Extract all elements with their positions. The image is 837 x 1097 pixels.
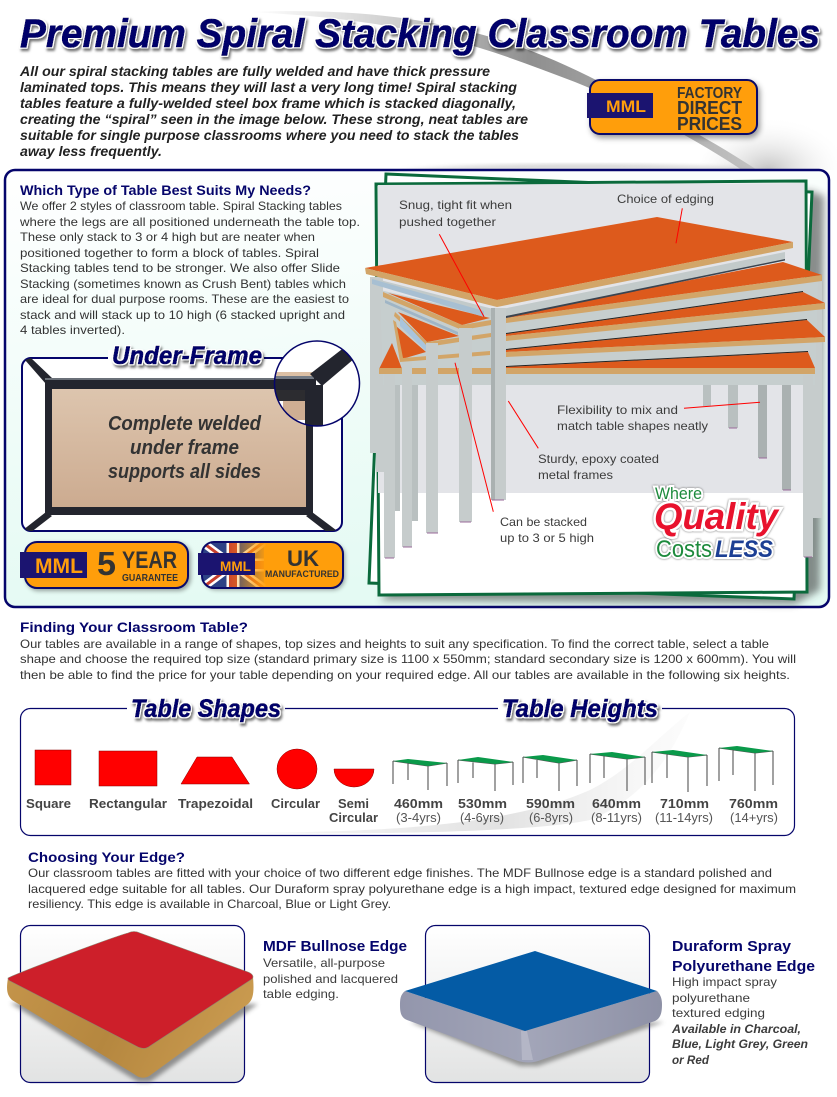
callout: flexibility	[557, 403, 708, 433]
text block: table styles: We offer 2 styles of classroom table. Spiral Stacking tables	[20, 199, 342, 213]
shape: semi circular: Circular	[329, 810, 378, 825]
height: 760mm: 760mm	[729, 796, 778, 811]
height: 640mm: 640mm	[592, 796, 641, 811]
height: 640mm	[590, 752, 645, 825]
text block: finding: then be able to find the price for your table depending on your required edge. All our tables are available in the following six heights.	[20, 668, 790, 682]
logo: where quality costs less: Where	[655, 484, 702, 503]
height: 460mm: 460mm	[394, 796, 443, 811]
shape: square: Square	[26, 796, 71, 811]
under-frame caption: Complete welded	[108, 413, 262, 435]
height: 590mm	[523, 755, 577, 825]
intro text: laminated tops. This means they will last a very long time! Spiral stacking	[20, 79, 517, 95]
under-frame caption: supports all sides	[108, 461, 261, 483]
intro text: creating the “spiral” seen in the image below. These strong, neat tables are	[20, 111, 528, 127]
text block: mdf edge: table edging.	[263, 987, 339, 1001]
height: 640mm: (8-11yrs)	[591, 810, 642, 825]
text block: mdf edge	[263, 938, 407, 1001]
panel: duraform edge image	[400, 926, 664, 1082]
text block: choosing: Our classroom tables are fitted with your choice of two different edge finishes. The MDF Bullnose edge is a standard polished and	[28, 866, 772, 880]
badge: factory direct prices: DIRECT	[677, 98, 742, 118]
badge: uk manufactured: MANUFACTURED	[265, 569, 339, 580]
height: 760mm	[719, 746, 778, 825]
magnifier circle	[274, 341, 361, 427]
intro text: tables feature a fully-welded steel box frame which is stacked diagonally,	[20, 95, 516, 111]
heading: table shapes: Table Shapes	[131, 695, 281, 723]
text block: table styles: Stacking tables tend to be stronger. We also offer Slide	[20, 261, 340, 275]
logo: where quality costs less: LESS	[715, 536, 773, 563]
height: 710mm	[652, 750, 713, 825]
callout: flexibility: Flexibility to mix and	[557, 403, 678, 417]
under-frame caption: under frame	[130, 437, 239, 459]
shape: rectangular: Rectangular	[89, 796, 167, 811]
text block: duraform edge: textured edging	[672, 1006, 765, 1020]
text block: table styles	[19, 199, 360, 337]
table 2	[383, 262, 822, 335]
callout lines	[439, 208, 760, 512]
panel: shapes and heights	[20, 695, 794, 836]
table frames backing	[380, 278, 818, 385]
table legs	[384, 308, 813, 558]
badge: factory direct prices: PRICES	[677, 114, 742, 134]
logo: where quality costs less	[654, 484, 780, 563]
shape: trapezoidal	[178, 757, 253, 811]
text block: table styles: 4 tables inverted).	[20, 323, 125, 337]
text block: duraform edge: Blue, Light Grey, Green	[672, 1037, 808, 1051]
badge: uk manufactured: UK	[287, 546, 319, 571]
badge: uk manufactured	[198, 542, 343, 588]
text block: table styles: are ideal for dual purpose rooms. These are the easiest to	[20, 292, 349, 306]
under-frame box	[22, 341, 361, 533]
callout: tight fit	[399, 198, 512, 229]
badge: factory direct prices	[587, 80, 757, 134]
under-frame caption	[108, 413, 262, 483]
background legs	[370, 277, 822, 521]
text block: table styles: Stacking (sometimes known as Crush Bent) tables which	[20, 277, 346, 291]
intro text	[19, 63, 528, 159]
back sheets	[369, 174, 812, 599]
table 5	[379, 343, 815, 374]
shape: semi circular	[329, 769, 378, 825]
intro text: suitable for single purpose classrooms where you need to stack the tables	[20, 127, 519, 143]
text block: duraform edge: Polyurethane Edge	[672, 958, 815, 975]
panel: which type of table	[5, 170, 829, 607]
text block: duraform edge	[671, 938, 815, 1067]
text block: table styles: positioned together to form a block of tables. Spiral	[20, 246, 319, 260]
text block: table styles: These only stack to 3 or 4 high but are neater when	[20, 230, 315, 244]
logo: where quality costs less: Costs	[656, 536, 712, 563]
heading: which type: Which Type of Table Best Suits My Needs?	[20, 182, 311, 198]
text block: duraform edge: Available in Charcoal,	[671, 1022, 801, 1036]
shape: trapezoidal: Trapezoidal	[178, 796, 253, 811]
text block: table styles: where the legs are all positioned underneath the table top.	[19, 215, 360, 229]
height: 460mm	[393, 759, 447, 825]
shape: circular	[271, 749, 320, 811]
heading: finding your table: Finding Your Classroom Table?	[20, 619, 248, 635]
text block: choosing	[28, 866, 796, 911]
badge: 5 year guarantee: 5	[97, 545, 116, 582]
callout: frames: Sturdy, epoxy coated	[538, 452, 659, 466]
text block: duraform edge: or Red	[672, 1053, 710, 1067]
heading: table heights: Table Heights	[502, 695, 658, 723]
intro text: All our spiral stacking tables are fully welded and have thick pressure	[19, 63, 490, 79]
text block: mdf edge: MDF Bullnose Edge	[263, 938, 407, 955]
title: Premium Spiral Stacking Classroom Tables	[20, 12, 820, 56]
height: 710mm: 710mm	[660, 796, 709, 811]
background swoosh	[250, 11, 837, 172]
callout: edging: Choice of edging	[617, 192, 714, 206]
table 4	[393, 319, 825, 362]
callout: stacking: Can be stacked	[500, 515, 587, 529]
height: 460mm: (3-4yrs)	[396, 810, 441, 825]
panel: mdf edge image	[7, 926, 258, 1082]
callout: tight fit: pushed together	[399, 215, 496, 229]
height: 590mm: (6-8yrs)	[529, 810, 573, 825]
badge: factory direct prices: MML	[606, 97, 646, 116]
height: 760mm: (14+yrs)	[730, 810, 778, 825]
text block: duraform edge: High impact spray	[672, 975, 777, 989]
text block: mdf edge: Versatile, all-purpose	[263, 956, 385, 970]
text block: duraform edge: Duraform Spray	[672, 938, 792, 955]
intro text: away less frequently.	[20, 143, 162, 159]
heading: choosing your edge: Choosing Your Edge?	[28, 849, 185, 865]
height: 530mm	[458, 757, 513, 825]
text block: mdf edge: polished and lacquered	[263, 972, 398, 986]
shape: semi circular: Semi	[338, 796, 369, 811]
text block: finding	[20, 637, 796, 682]
badge: 5 year guarantee: GUARANTEE	[122, 572, 178, 584]
logo: where quality costs less: Quality	[654, 496, 780, 537]
text block: duraform edge: polyurethane	[672, 991, 750, 1005]
height: 530mm: (4-6yrs)	[460, 810, 504, 825]
shape: rectangular	[89, 751, 167, 811]
badge: uk manufactured: MML	[220, 558, 251, 574]
shape: circular: Circular	[271, 796, 320, 811]
callout: tight fit: Snug, tight fit when	[399, 198, 512, 212]
text block: choosing: resiliency. This edge is available in Charcoal, Blue or Light Grey.	[28, 897, 391, 911]
under-frame heading: Under-Frame	[112, 342, 262, 370]
badge: 5 year guarantee	[20, 542, 188, 588]
text block: finding: shape and choose the required top size (standard primary size is 1100 x 550mm; standard secondary size is 1200 x 600mm). You will	[20, 652, 796, 666]
text block: table styles: stack and will stack up to 10 high (6 stacked upright and	[20, 308, 345, 322]
photo: stacked tables	[365, 174, 825, 604]
table 1	[365, 217, 793, 318]
height: 530mm: 530mm	[458, 796, 507, 811]
text block: choosing: lacquered edge suitable for all tables. Our Duraform spray polyurethane edge is a high impact, textured edge designed for maximum	[28, 882, 796, 896]
height: 590mm: 590mm	[526, 796, 575, 811]
callout: stacking: up to 3 or 5 high	[500, 531, 594, 545]
badge: 5 year guarantee: MML	[35, 555, 83, 578]
badge: 5 year guarantee: YEAR	[122, 547, 177, 574]
shape: square	[26, 750, 71, 811]
callout: frames: metal frames	[538, 468, 613, 482]
text block: finding: Our tables are available in a range of shapes, top sizes and heights to suit any specification. To find the correct table, select a table	[20, 637, 769, 651]
callout: flexibility: match table shapes neatly	[557, 419, 708, 433]
height: 710mm: (11-14yrs)	[655, 810, 713, 825]
callout: stacking	[500, 515, 594, 545]
callout: frames	[538, 452, 659, 482]
badge: factory direct prices: FACTORY	[677, 85, 742, 102]
table 3	[394, 291, 825, 352]
